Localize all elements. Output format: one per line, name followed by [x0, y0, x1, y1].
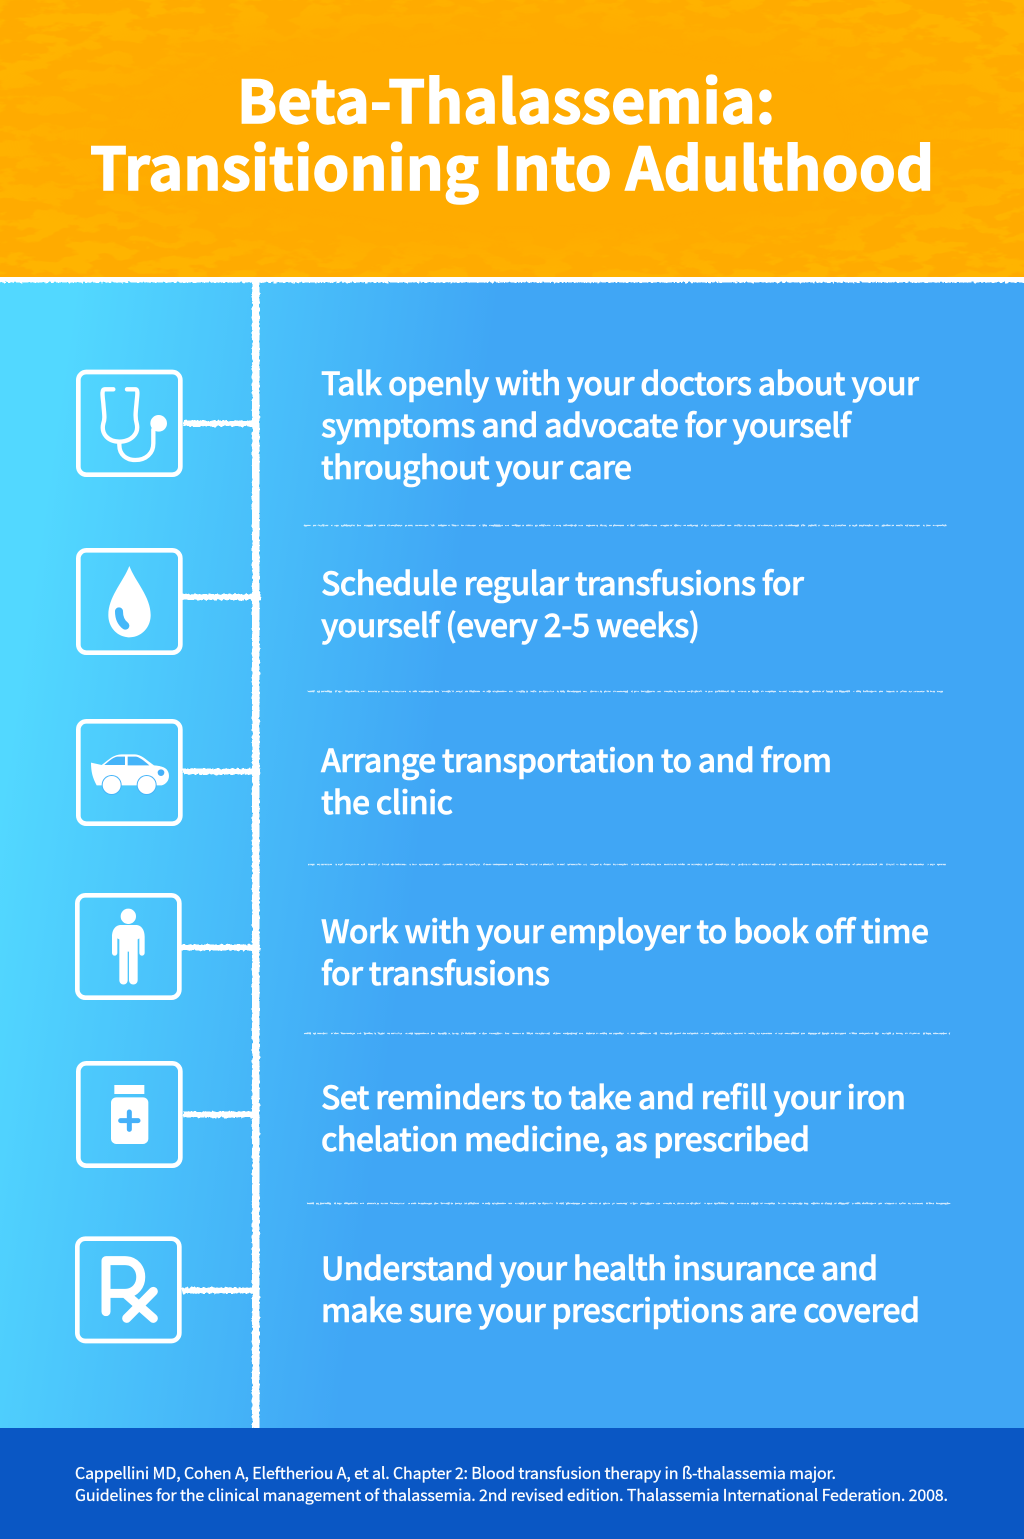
- step 3 text: Arrange transportation to and from: [321, 736, 832, 782]
- citation text: Cappellini MD, Cohen A, Eleftheriou A, et al. Chapter 2: Blood transfusion therapy in ß-thalassemia major.: [75, 1460, 836, 1484]
- icon: person: [77, 895, 179, 998]
- step 4 text: [321, 907, 929, 995]
- step 4 text: for transfusions: [321, 949, 550, 995]
- step 1 text: Talk openly with your doctors about your: [321, 359, 920, 405]
- title: [90, 55, 934, 207]
- step 5 text: chelation medicine, as prescribed: [321, 1115, 810, 1161]
- icon: blood drop: [78, 550, 180, 653]
- timeline vertical line: [252, 281, 260, 1428]
- step 6 text: make sure your prescriptions are covered: [321, 1286, 920, 1332]
- citation text: [75, 1460, 948, 1506]
- title: Beta-Thalassemia:: [237, 55, 775, 140]
- step 1 text: [321, 359, 920, 489]
- title: Transitioning Into Adulthood: [90, 122, 934, 207]
- step 6 text: [321, 1244, 920, 1332]
- step 1 text: symptoms and advocate for yourself: [321, 401, 853, 447]
- step 5 text: Set reminders to take and refill your iron: [321, 1073, 906, 1119]
- citation text: Guidelines for the clinical management of thalassemia. 2nd revised edition. Thalassemia International Federation. 2008.: [75, 1482, 948, 1506]
- step 3 text: the clinic: [321, 778, 453, 824]
- icon: stethoscope: [78, 372, 180, 475]
- step 6 text: Understand your health insurance and: [321, 1244, 878, 1290]
- connectors from icons to timeline: [179, 420, 261, 1294]
- step 1 text: throughout your care: [321, 443, 632, 489]
- panel: references footer: [0, 1428, 1024, 1539]
- step 5 text: [321, 1073, 906, 1161]
- step 2 text: yourself (every 2-5 weeks): [321, 601, 700, 647]
- icon: Rx symbol: [77, 1239, 179, 1341]
- step 3 text: [321, 736, 832, 824]
- white header rule: [0, 277, 1024, 282]
- step 2 text: [321, 559, 805, 647]
- icon: car: [78, 721, 180, 824]
- step 4 text: Work with your employer to book off time: [321, 907, 929, 953]
- panel: orange header: [0, 0, 1024, 277]
- step 2 text: Schedule regular transfusions for: [321, 559, 805, 605]
- panel: content background: [0, 277, 1024, 1428]
- icon: medicine bottle: [78, 1063, 180, 1166]
